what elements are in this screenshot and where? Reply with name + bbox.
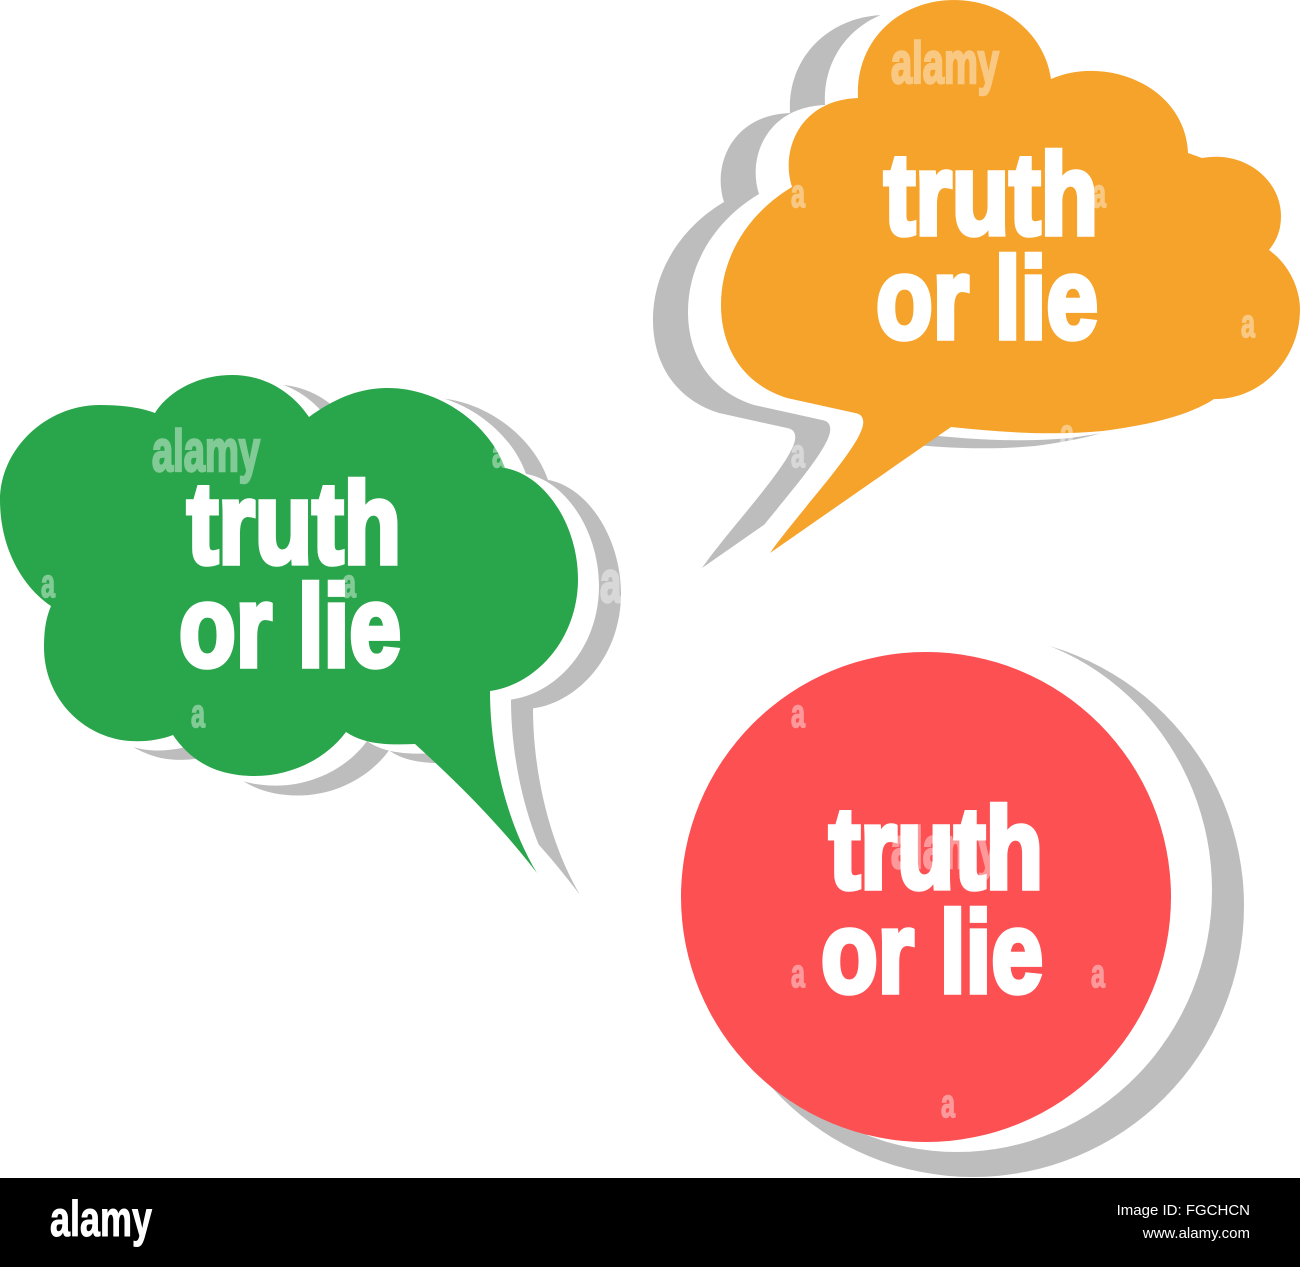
- orange bubble watermark: a: [1092, 172, 1106, 216]
- green bubble white border: [21, 380, 599, 884]
- red circle watermark: a: [1091, 952, 1105, 996]
- green bubble shape: [0, 375, 578, 873]
- sticker: red circle: [681, 628, 1244, 1177]
- orange bubble watermark: a: [791, 172, 805, 216]
- red circle white border: [702, 628, 1212, 1152]
- red circle shadow: [702, 635, 1244, 1177]
- orange bubble shape: [721, 0, 1300, 553]
- red circle watermark: alamy: [891, 816, 999, 881]
- red circle text: truth or lie: [821, 785, 1043, 1017]
- green bubble text: truth or lie: [179, 460, 401, 691]
- green bubble watermark: alamy: [600, 550, 708, 615]
- red circle text: truth or lie: truth: [829, 785, 1043, 913]
- red circle text: truth or lie: or lie: [821, 889, 1043, 1017]
- red circle watermark: a: [941, 1082, 955, 1126]
- orange bubble text: truth or lie: [876, 131, 1098, 363]
- orange bubble watermark: alamy: [891, 31, 999, 96]
- orange bubble shadow: [653, 15, 1232, 568]
- sticker: green cloud speech bubble: [0, 375, 708, 895]
- orange bubble text: truth or lie: truth: [884, 131, 1098, 259]
- footer image id: Image ID: FGCHCN: [1117, 1202, 1250, 1219]
- orange bubble watermark: a: [791, 432, 805, 476]
- red circle shape: [681, 652, 1171, 1142]
- footer logo: alamy: alamy: [50, 1191, 152, 1247]
- green bubble text: truth or lie: truth: [187, 460, 401, 588]
- green bubble text: truth or lie: or lie: [179, 563, 401, 691]
- footer bar: [0, 1178, 1300, 1267]
- green bubble watermark: a: [342, 562, 356, 606]
- green bubble watermark: alamy: [152, 419, 260, 484]
- sticker: orange cloud speech bubble: [653, 0, 1300, 568]
- orange bubble watermark: a: [1241, 302, 1255, 346]
- green bubble shadow: [43, 385, 621, 895]
- orange bubble text: truth or lie: or lie: [876, 235, 1098, 363]
- green bubble watermark: a: [41, 562, 55, 606]
- red circle watermark: a: [791, 952, 805, 996]
- red circle watermark: a: [791, 692, 805, 736]
- orange bubble white border: [688, 7, 1267, 560]
- green bubble watermark: a: [191, 692, 205, 736]
- orange bubble watermark: [791, 31, 1255, 476]
- green bubble watermark: a: [492, 432, 506, 476]
- green bubble watermark: [41, 419, 708, 736]
- red circle watermark: [791, 692, 1105, 1126]
- footer website: www.alamy.com: [1142, 1225, 1250, 1242]
- orange bubble watermark: a: [1060, 412, 1074, 456]
